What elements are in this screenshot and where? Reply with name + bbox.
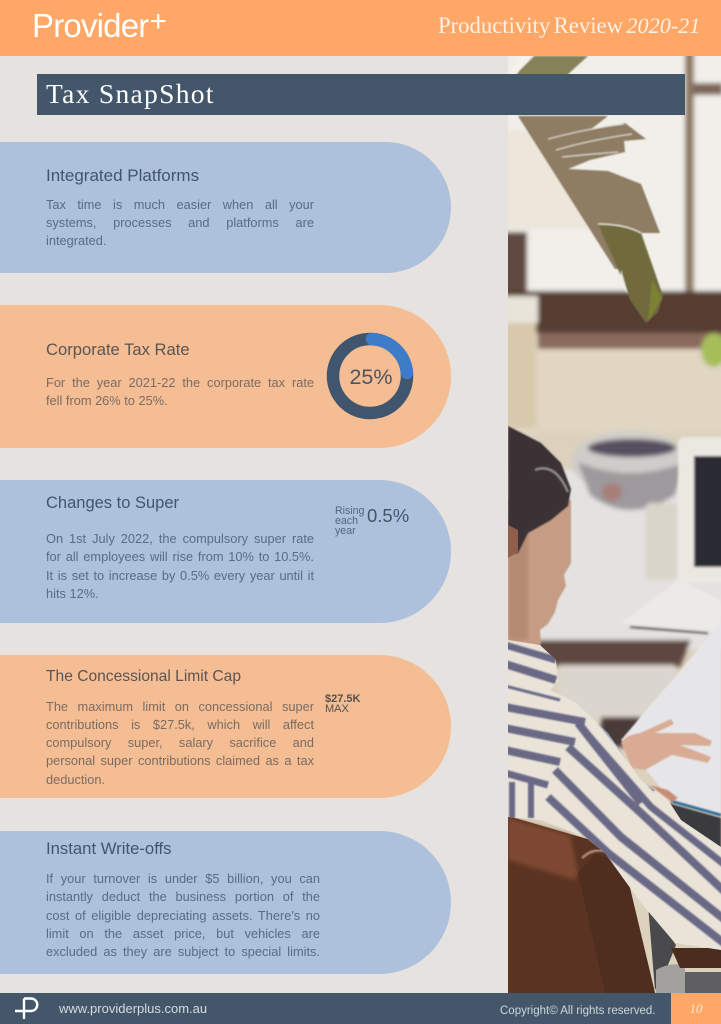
title banner <box>37 74 685 115</box>
body text: Tax time is much easier when all your <box>46 197 314 212</box>
body text: The maximum limit on concessional super <box>46 699 314 714</box>
body text: compulsory super, salary sacrifice and <box>46 735 314 750</box>
heading: The Concessional Limit Cap <box>46 668 241 685</box>
body text: personal super contributions claimed as a tax <box>46 753 314 768</box>
page number <box>671 993 721 1024</box>
stat: rising 0.5%: 0.5% <box>367 505 409 526</box>
page number: 10 <box>690 1001 702 1016</box>
icon: P logo mark <box>15 997 38 1019</box>
panel: corporate tax rate <box>0 305 451 448</box>
body text: systems, processes and platforms are <box>46 215 314 230</box>
body text: contributions is $27.5k, which will affect <box>46 717 314 732</box>
stat: rising 0.5%: Rising <box>335 505 364 517</box>
footer bar <box>0 993 721 1024</box>
body text: instantly deduct the business portion of the <box>46 889 320 904</box>
body text: fell from 26% to 25%. <box>46 393 168 408</box>
header bar <box>0 0 721 56</box>
body text: On 1st July 2022, the compulsory super rate <box>46 531 314 546</box>
body text <box>46 197 314 248</box>
chair <box>508 816 721 993</box>
body text <box>46 375 314 408</box>
laptop <box>621 437 721 633</box>
logo: Provider+: Provider+ <box>32 5 166 44</box>
striped shirt <box>500 630 721 960</box>
leaf <box>510 56 663 323</box>
donut chart: 25% <box>326 332 414 420</box>
website: www.providerplus.com.au <box>59 1001 207 1016</box>
heading: Changes to Super <box>46 494 179 512</box>
stat: $27.5K max: MAX <box>325 702 349 714</box>
body text <box>46 531 314 601</box>
panel: concessional limit cap <box>0 655 451 798</box>
photo: woman reading at desk <box>508 56 721 993</box>
body text <box>46 699 314 787</box>
copyright: Copyright© All rights reserved. <box>500 1005 655 1017</box>
body text: for all employees will rise from 10% to 10.5%. <box>46 549 314 564</box>
stat: rising 0.5% <box>335 505 409 537</box>
body text: For the year 2021-22 the corporate tax rate <box>46 375 314 390</box>
heading: Tax SnapShot: Tax SnapShot <box>46 78 215 109</box>
body text <box>46 871 320 959</box>
stat: $27.5K max <box>325 693 360 714</box>
panel: instant write-offs <box>0 831 451 974</box>
body text: cost of eligible depreciating assets. There's no <box>46 908 320 923</box>
body text: excluded as they are subject to special limits. <box>46 944 320 959</box>
panel: integrated platforms <box>0 142 451 273</box>
stat: $27.5K max: $27.5K <box>325 693 360 705</box>
publication title: Productivity Review 2020-21 <box>438 13 700 38</box>
heading: Instant Write-offs <box>46 839 172 858</box>
body text: limit on the asset price, but vehicles are <box>46 926 320 941</box>
body text: deduction. <box>46 772 105 787</box>
body text: integrated. <box>46 233 106 248</box>
stat: rising 0.5%: year <box>335 525 356 537</box>
panel: changes to super <box>0 480 451 623</box>
hair and face <box>508 426 571 645</box>
body text: hits 12%. <box>46 586 99 601</box>
body text: If your turnover is under $5 billion, you can <box>46 871 320 886</box>
stat: rising 0.5%: each <box>335 515 358 527</box>
heading: Integrated Platforms <box>46 166 199 185</box>
body text: It is set to increase by 0.5% every year until it <box>46 568 314 583</box>
donut chart: 25%: 25% <box>349 365 393 389</box>
heading: Corporate Tax Rate <box>46 340 190 359</box>
book and hand <box>621 623 721 870</box>
